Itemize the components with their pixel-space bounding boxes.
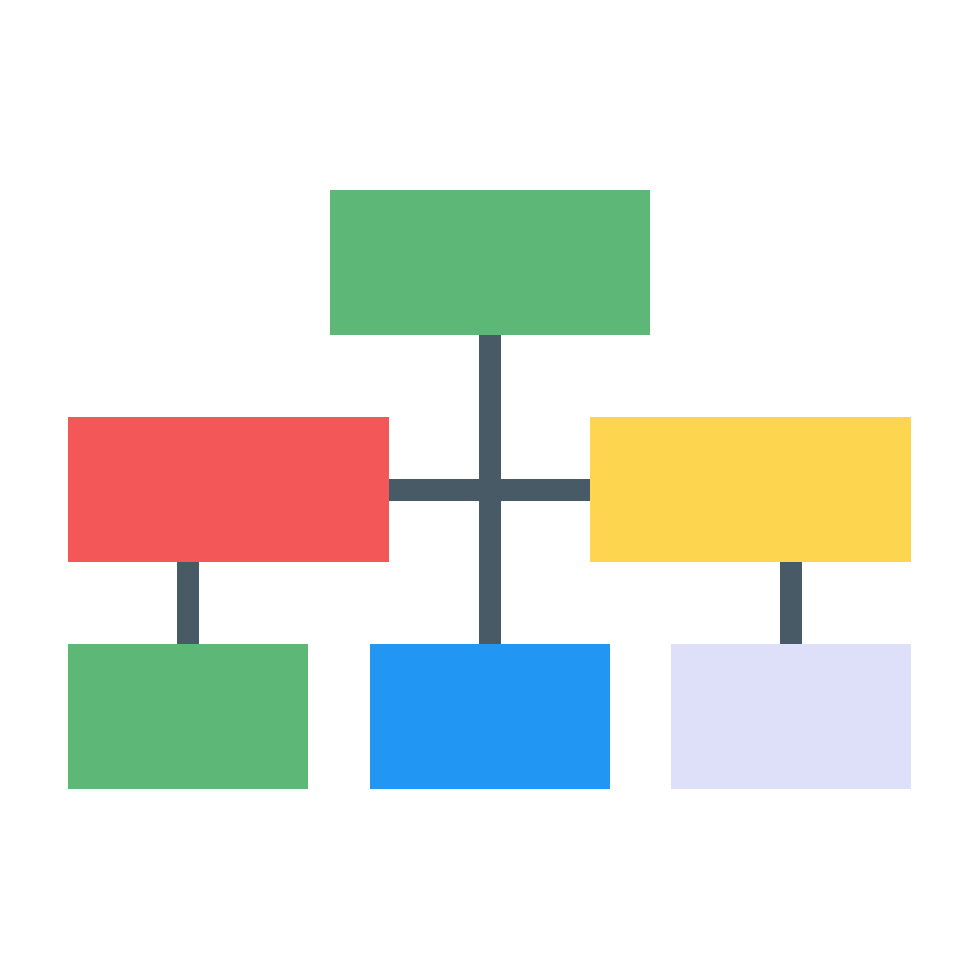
- box: bottom lavender: [671, 644, 911, 789]
- connectors: [177, 334, 802, 645]
- box: bottom green: [68, 644, 308, 789]
- box: middle yellow: [590, 417, 911, 562]
- box: bottom blue: [370, 644, 610, 789]
- box: middle red: [68, 417, 389, 562]
- box: top green: [330, 190, 650, 335]
